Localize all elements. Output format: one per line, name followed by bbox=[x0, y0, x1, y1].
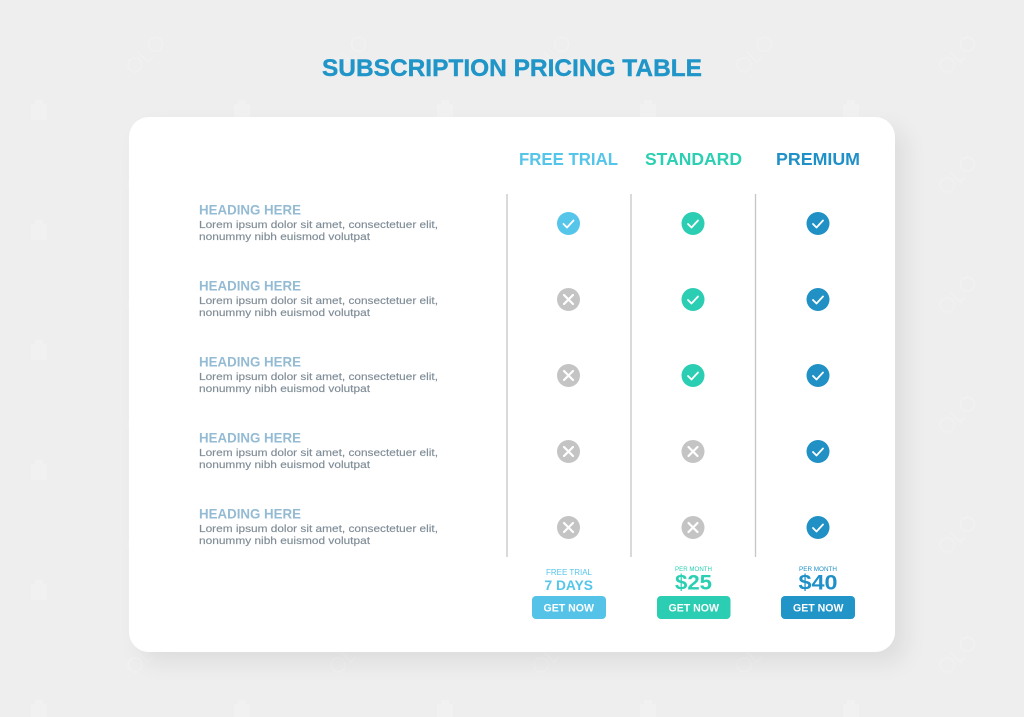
icon: standard row 4 cross bbox=[682, 440, 704, 463]
icon: premium row 2 check bbox=[806, 288, 830, 311]
icon: premium row 3 check bbox=[806, 364, 830, 387]
icon: free trial row 4 cross bbox=[557, 440, 580, 463]
icon: standard row 1 check bbox=[682, 212, 704, 235]
icon: free trial row 3 cross bbox=[557, 364, 580, 387]
feature row 3 text: HEADING HERE bbox=[199, 354, 301, 370]
price: premium: $40 bbox=[798, 572, 838, 594]
feature row 4 text: nonummy nibh euismod volutpat bbox=[199, 459, 370, 471]
column header: standard: STANDARD bbox=[645, 149, 742, 169]
icon: premium row 5 check bbox=[806, 516, 830, 539]
feature row 2 text: Lorem ipsum dolor sit amet, consectetuer elit, bbox=[199, 295, 438, 307]
feature row 1 text: Lorem ipsum dolor sit amet, consectetuer elit, bbox=[199, 219, 438, 231]
title: SUBSCRIPTION PRICING TABLE bbox=[322, 55, 702, 82]
icon: free trial row 5 cross bbox=[557, 516, 580, 539]
price: free trial: FREE TRIAL bbox=[546, 568, 593, 577]
price: standard: $25 bbox=[675, 572, 712, 594]
icon: premium row 1 check bbox=[806, 212, 830, 235]
icon: standard row 5 cross bbox=[682, 516, 704, 539]
button: standard get now: GET NOW bbox=[668, 602, 720, 614]
button: standard get now bbox=[657, 596, 730, 619]
column header: premium: PREMIUM bbox=[776, 149, 860, 169]
icon: standard row 3 check bbox=[682, 364, 704, 387]
feature row 3 text bbox=[199, 354, 438, 395]
feature row 2 text bbox=[199, 278, 438, 319]
button: premium get now: GET NOW bbox=[793, 602, 844, 614]
feature row 5 text: nonummy nibh euismod volutpat bbox=[199, 535, 370, 547]
feature row 1 text bbox=[199, 202, 438, 243]
price: free trial: 7 DAYS bbox=[544, 577, 593, 593]
icon: standard row 2 check bbox=[682, 288, 704, 311]
feature row 5 text: HEADING HERE bbox=[199, 506, 301, 522]
price: free trial bbox=[544, 568, 593, 593]
panel: pricing card bbox=[129, 117, 895, 652]
feature row 4 text bbox=[199, 430, 438, 471]
feature row 1 text: HEADING HERE bbox=[199, 202, 301, 218]
button: premium get now bbox=[781, 596, 855, 619]
price: standard: PER MONTH bbox=[675, 566, 712, 573]
feature row 5 text bbox=[199, 506, 438, 547]
feature row 2 text: nonummy nibh euismod volutpat bbox=[199, 307, 370, 319]
icon: premium row 4 check bbox=[806, 440, 830, 463]
feature row 4 text: HEADING HERE bbox=[199, 430, 301, 446]
icon: free trial row 1 check bbox=[557, 212, 580, 235]
feature row 5 text: Lorem ipsum dolor sit amet, consectetuer elit, bbox=[199, 523, 438, 535]
button: free trial get now: GET NOW bbox=[544, 602, 595, 614]
feature row 3 text: Lorem ipsum dolor sit amet, consectetuer elit, bbox=[199, 371, 438, 383]
feature row 2 text: HEADING HERE bbox=[199, 278, 301, 294]
column header: free trial: FREE TRIAL bbox=[519, 149, 618, 169]
price: premium: PER MONTH bbox=[799, 566, 837, 573]
feature row 4 text: Lorem ipsum dolor sit amet, consectetuer elit, bbox=[199, 447, 438, 459]
feature row 1 text: nonummy nibh euismod volutpat bbox=[199, 231, 370, 243]
icon: free trial row 2 cross bbox=[557, 288, 580, 311]
feature row 3 text: nonummy nibh euismod volutpat bbox=[199, 383, 370, 395]
button: free trial get now bbox=[532, 596, 606, 619]
